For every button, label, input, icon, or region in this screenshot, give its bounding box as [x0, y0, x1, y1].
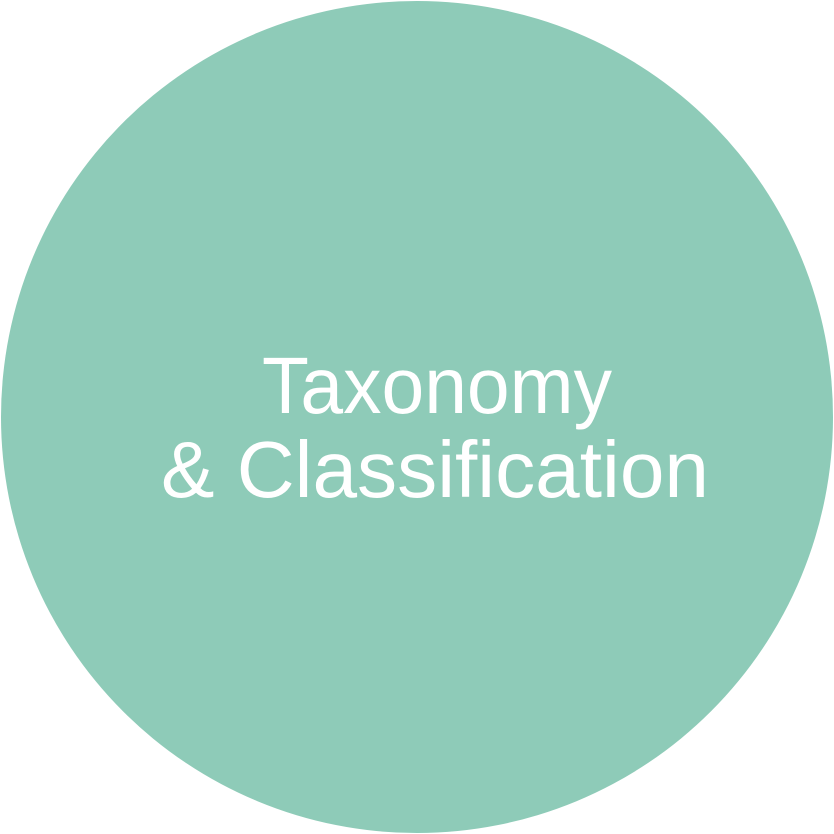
title — [161, 341, 709, 514]
title: Taxonomy — [262, 341, 612, 430]
title: & Classification — [161, 425, 709, 514]
